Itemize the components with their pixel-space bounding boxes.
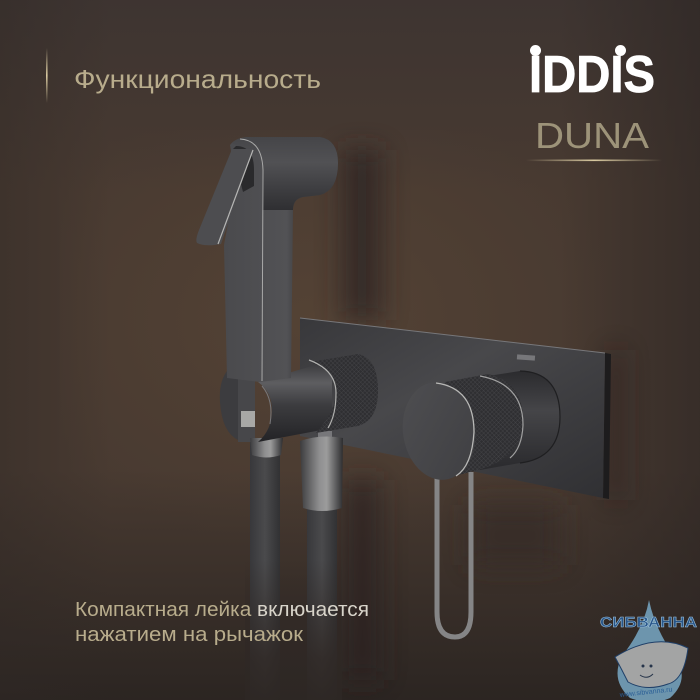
trigger lever	[196, 149, 253, 245]
trigger slot	[232, 146, 254, 192]
caption second line: нажатием на рычажок	[75, 623, 304, 646]
soft shadows on wall	[342, 150, 622, 680]
shower body	[224, 137, 338, 382]
left knurled valve	[258, 354, 378, 442]
right knurled section	[445, 374, 523, 476]
heading accent line	[46, 48, 48, 103]
brand logo: iDDIS: IDDIS	[529, 46, 655, 104]
tub face	[640, 664, 653, 677]
hoses	[245, 440, 342, 700]
bathtub	[615, 642, 688, 688]
heading: Функциональность	[74, 64, 321, 94]
shower head top	[232, 137, 338, 210]
watermark: Sibvanna	[600, 600, 698, 700]
left swivel holder	[220, 362, 283, 458]
hose connector	[300, 431, 343, 511]
brand text: СИБВАННА	[600, 615, 698, 631]
lever loop	[437, 472, 471, 637]
right valve base	[475, 371, 560, 470]
wall plate	[300, 318, 611, 499]
water drop	[618, 600, 682, 700]
site url: www.sibvanna.ru	[618, 686, 673, 699]
series name: DUNA	[535, 115, 649, 156]
series underline	[526, 160, 662, 161]
hand shower	[196, 137, 338, 382]
edge highlight	[240, 139, 263, 381]
caption: Компактная лейка включается	[75, 598, 369, 621]
knob disc	[397, 377, 481, 485]
